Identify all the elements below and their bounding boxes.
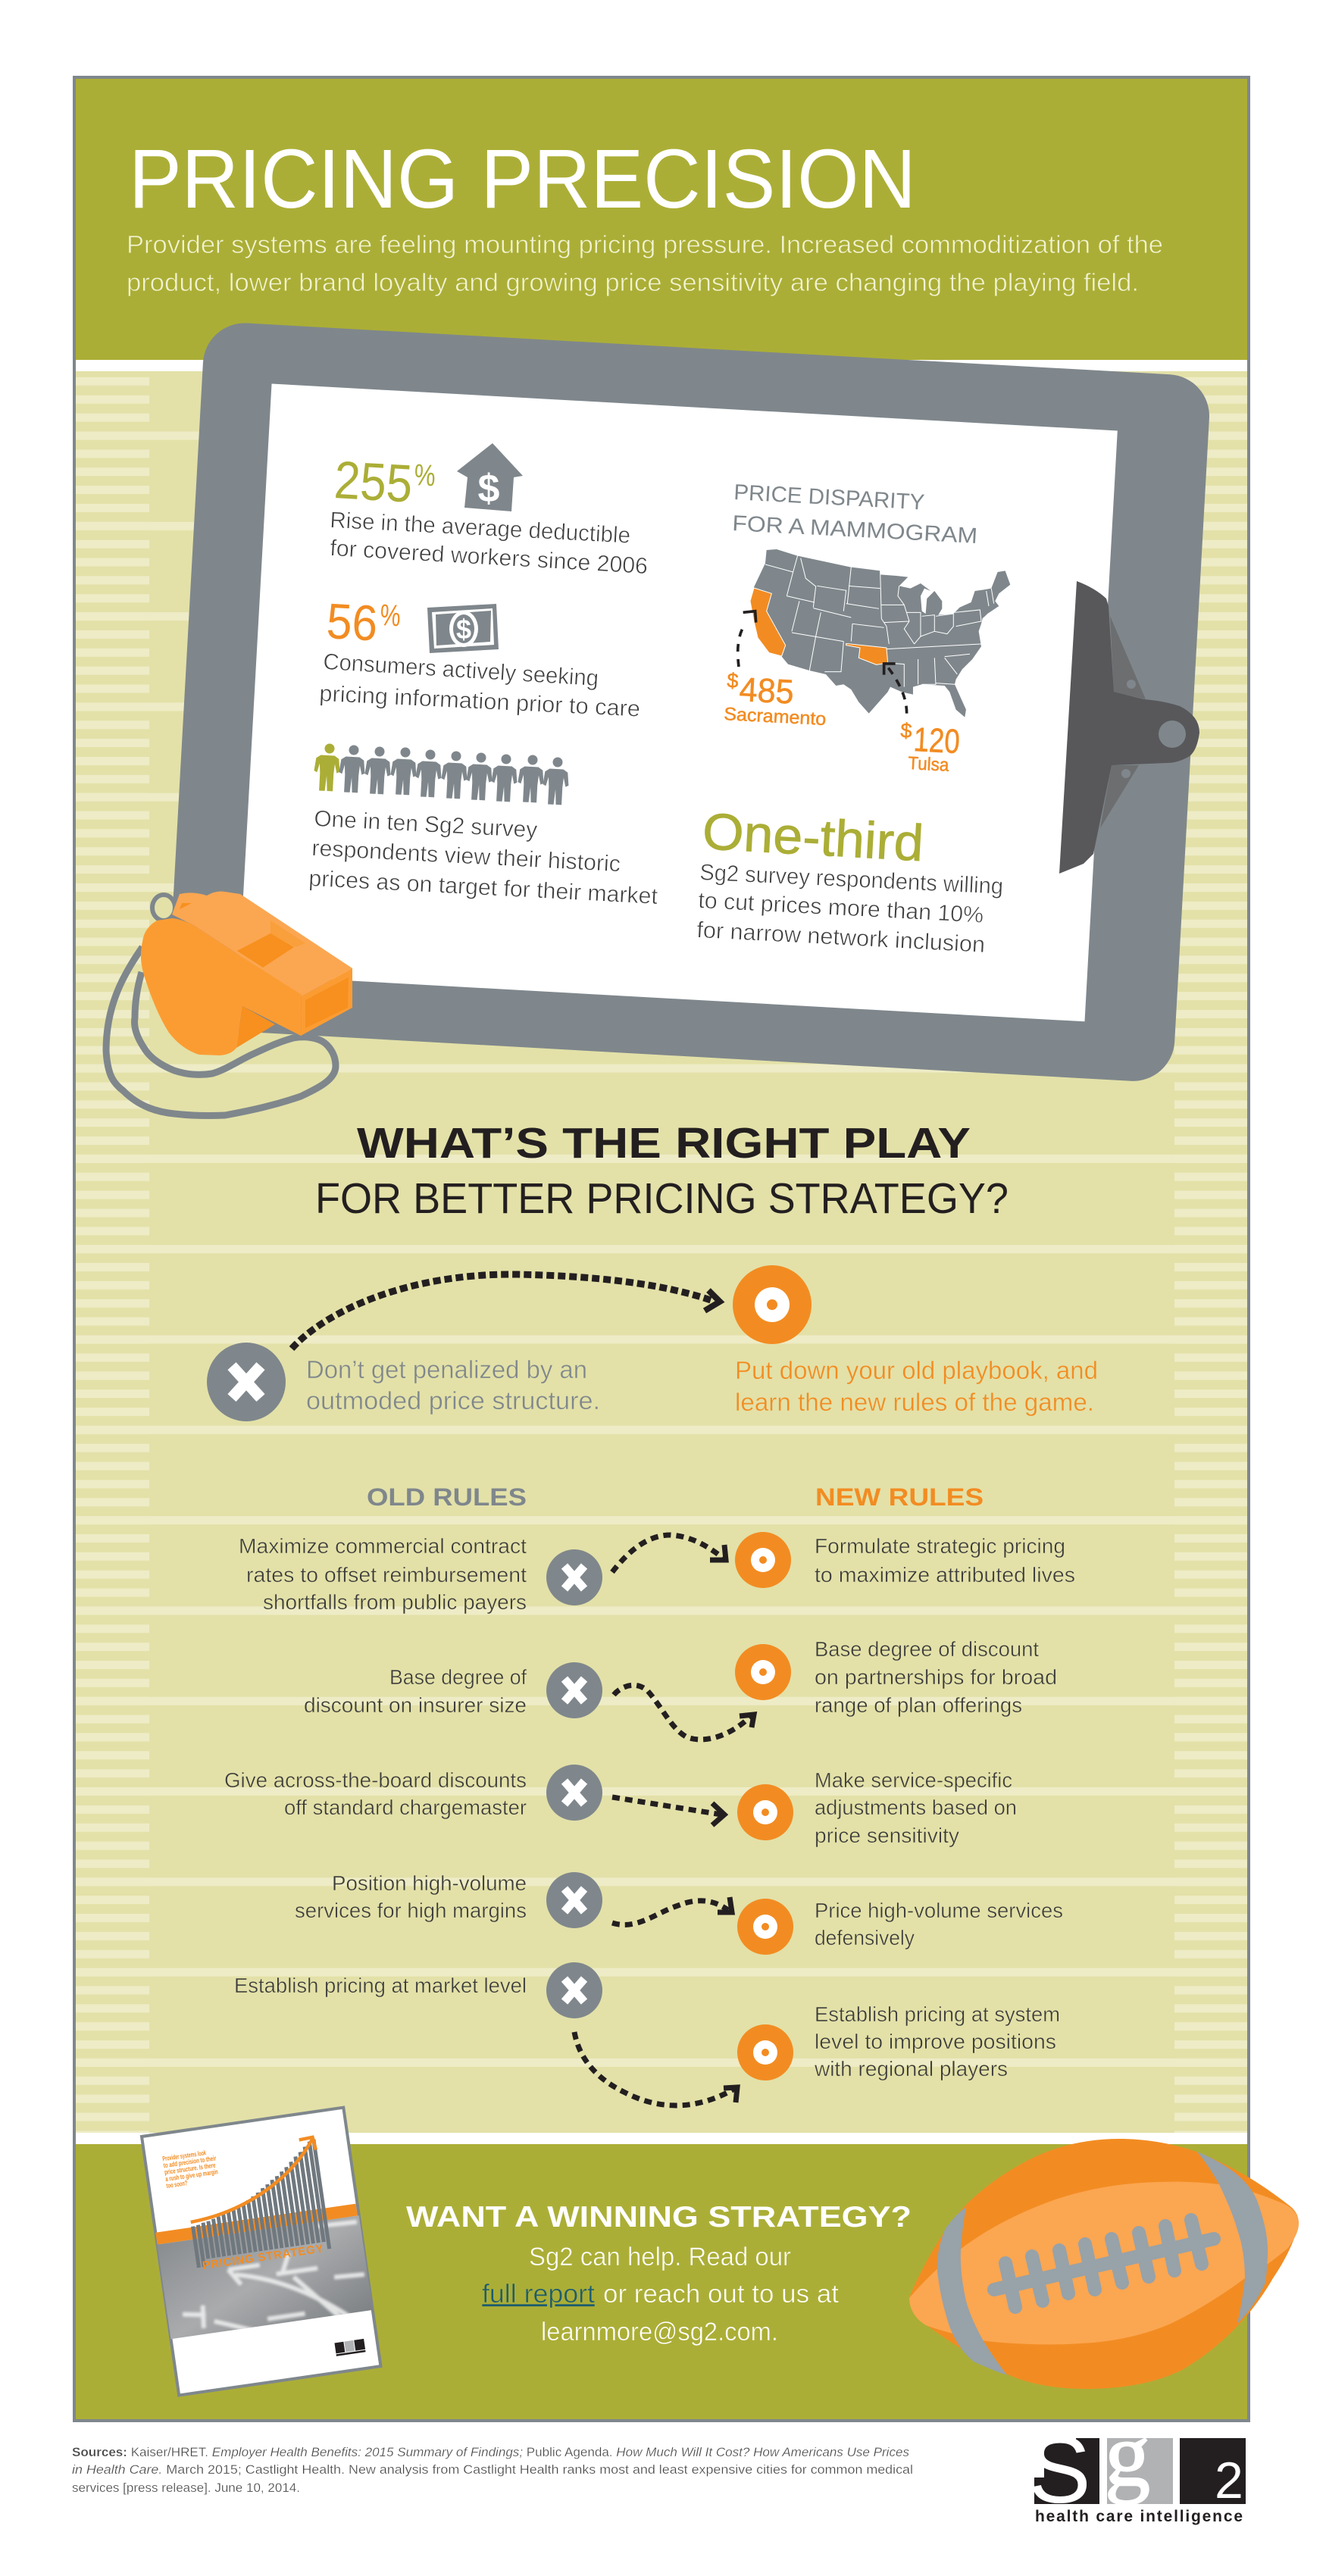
- list: old rules text: shortfalls from public payers: [263, 1590, 527, 1614]
- list: old rules text: rates to offset reimbursement: [246, 1563, 527, 1587]
- stat: 255% deductible: 255: [333, 450, 414, 514]
- logo: sg2: S: [1028, 2418, 1091, 2523]
- list: old rules text: services for high margins: [295, 1899, 527, 1922]
- cover teaser text: price structure. Is there: [164, 2162, 216, 2176]
- label: tulsa price: $: [900, 719, 912, 742]
- state: california: [750, 588, 786, 656]
- list: new rules text: Make service-specific: [815, 1768, 1012, 1792]
- call to action: or reach out to us at: [603, 2280, 840, 2309]
- arrow: rising price: [181, 2137, 324, 2222]
- list: new rules text: level to improve positions: [815, 2030, 1056, 2053]
- logo: sg2: g: [1105, 2404, 1150, 2505]
- cover logo: [334, 2339, 366, 2356]
- list: new rules text: range of plan offerings: [815, 1693, 1022, 1717]
- list: new rules text: on partnerships for broad: [815, 1665, 1057, 1689]
- heading: old rules: OLD RULES: [367, 1483, 527, 1511]
- list: new rules text: Base degree of discount: [815, 1637, 1039, 1661]
- stat: 56% consumers: Consumers actively seeking: [323, 649, 599, 691]
- stat: one in ten: [308, 744, 658, 909]
- icons: old rule x markers: [546, 1549, 602, 2018]
- intro text: [127, 230, 1163, 296]
- stat: one-third: Sg2 survey respondents willing: [699, 860, 1004, 899]
- stat: one-third: to cut prices more than 10%: [698, 888, 984, 928]
- panel: header band: [74, 76, 1249, 360]
- heading: right play: FOR BETTER PRICING STRATEGY?: [315, 1174, 1009, 1223]
- icon: whistle with cord: [106, 892, 352, 1116]
- stat: one in ten: prices as on target for their market: [308, 866, 658, 909]
- list: old rules text: Establish pricing at market level: [234, 1974, 527, 1997]
- intro text: Provider systems are feeling mounting pricing pressure. Increased commoditization of the: [127, 230, 1163, 258]
- label: sacramento price: [724, 669, 827, 730]
- stat: 56% consumers: %: [380, 599, 402, 633]
- icon: house with dollar: [457, 443, 523, 511]
- stat: one-third: One-third: [701, 802, 925, 872]
- stat: price disparity map: [724, 480, 1010, 776]
- label: sacramento price: 485: [738, 670, 795, 711]
- stat: 255% deductible: %: [414, 458, 436, 493]
- stat: 255% deductible: [330, 443, 649, 579]
- cover teaser text: a rush to give up margin: [165, 2168, 218, 2183]
- label: sacramento price: Sacramento: [724, 704, 827, 730]
- panel: footer band: [74, 2144, 1249, 2420]
- stat: one-third: [696, 802, 1004, 958]
- state: oklahoma: [846, 643, 888, 664]
- label: sacramento price: $: [727, 669, 739, 692]
- icon: gray x: [207, 1343, 286, 1421]
- stat: 56% consumers: 56: [325, 592, 379, 652]
- text: put down your playbook: [735, 1356, 1098, 1416]
- call to action: [406, 2201, 912, 2346]
- arrow: to california: [738, 611, 756, 667]
- text: outmoded price structure: Don’t get penalized by an: [306, 1355, 587, 1383]
- list: new rules text: Price high-volume services: [815, 1899, 1063, 1922]
- text: put down your playbook: learn the new rules of the game.: [735, 1388, 1094, 1416]
- text: outmoded price structure: outmoded price structure.: [306, 1386, 600, 1415]
- arrow: main play: [292, 1274, 720, 1349]
- label: tulsa price: Tulsa: [908, 753, 950, 776]
- sources: in Health Care. March 2015; Castlight Health. New analysis from Castlight Health ranks most and least expensive cities for common medical: [72, 2462, 913, 2477]
- intro text: product, lower brand loyalty and growing price sensitivity are changing the playing field.: [127, 268, 1139, 296]
- heading: new rules: NEW RULES: [815, 1483, 984, 1511]
- cover title: PRICING STRATEGY: [202, 2242, 324, 2272]
- cover teaser text: to add precision to their: [163, 2154, 217, 2169]
- panel: football field: [74, 360, 1249, 2144]
- text: put down your playbook: Put down your old playbook, and: [735, 1356, 1098, 1384]
- list: old rules text: Position high-volume: [332, 1871, 527, 1895]
- heading: price disparity: FOR A MAMMOGRAM: [732, 511, 978, 549]
- stat: one-third: for narrow network inclusion: [696, 918, 986, 958]
- logo: sg2: 2: [1215, 2452, 1243, 2509]
- sources: Sources: Kaiser/HRET. Employer Health Benefits: 2015 Summary of Findings; Public Agenda. How Much Will It Cost? How Americans Use Prices: [72, 2445, 909, 2459]
- heading: price disparity: [732, 480, 978, 549]
- list: old rules text: Base degree of: [389, 1665, 527, 1689]
- bar chart: rising barcode: [183, 2140, 330, 2268]
- call to action: WANT A WINNING STRATEGY?: [406, 2201, 912, 2234]
- list: old rules text: Maximize commercial contract: [239, 1534, 527, 1558]
- stat: one in ten: respondents view their historic: [311, 836, 621, 877]
- list: new rules text: with regional players: [814, 2057, 1008, 2080]
- list: old rules text: discount on insurer size: [304, 1693, 527, 1717]
- label: tulsa price: [900, 719, 961, 776]
- icon: dollar bill: [427, 604, 499, 653]
- sources: services [press release]. June 10, 2014.: [72, 2481, 300, 2495]
- icons: new rule targets: [735, 1532, 793, 2080]
- map: united states: [738, 549, 1010, 717]
- stat: 56% consumers: [319, 592, 641, 722]
- cover teaser text: [162, 2147, 220, 2190]
- arrows: rule connectors: [574, 1535, 754, 2106]
- arrow: to oklahoma: [884, 664, 907, 714]
- icon: dollar bill: $: [456, 614, 471, 645]
- text: outmoded price structure: [306, 1355, 600, 1415]
- report cover: [142, 2108, 380, 2395]
- icon: orange target: [733, 1265, 812, 1344]
- label: tulsa price: 120: [912, 720, 961, 761]
- list: new rules text: Establish pricing at system: [815, 2002, 1060, 2026]
- list: new rules text: defensively: [815, 1926, 915, 1949]
- sources: [72, 2445, 913, 2495]
- list: old rules text: off standard chargemaster: [284, 1796, 527, 1819]
- list: new rules text: to maximize attributed lives: [815, 1563, 1075, 1587]
- call to action: Sg2 can help. Read our: [529, 2243, 791, 2271]
- list: old rules text: Give across-the-board discounts: [224, 1768, 527, 1792]
- cover teaser text: Provider systems look: [162, 2149, 207, 2162]
- stat: one in ten: One in ten Sg2 survey: [314, 806, 538, 843]
- stat: 255% deductible: for covered workers since 2006: [330, 536, 649, 579]
- call to action: learnmore@sg2.com.: [541, 2318, 778, 2346]
- list: old rules text: [224, 1534, 527, 1997]
- panel: clipboard tablet: [166, 321, 1212, 1083]
- list: new rules text: Formulate strategic pricing: [815, 1534, 1065, 1558]
- title: PRICING PRECISION: [129, 133, 916, 226]
- list: new rules text: price sensitivity: [815, 1824, 959, 1847]
- icon: football: [909, 2139, 1299, 2389]
- heading: price disparity: PRICE DISPARITY: [733, 480, 925, 515]
- cover teaser text: too soon?: [166, 2179, 188, 2190]
- list: new rules text: adjustments based on: [815, 1796, 1017, 1819]
- call to action: full report: [482, 2280, 596, 2309]
- stat: 255% deductible: Rise in the average deductible: [330, 508, 631, 549]
- stat: 56% consumers: pricing information prior to care: [319, 681, 641, 722]
- heading: right play: WHAT’S THE RIGHT PLAY: [357, 1119, 971, 1168]
- icon: row of ten people: [313, 744, 570, 805]
- icon: house with dollar: $: [478, 467, 500, 511]
- logo: sg2: [1028, 2404, 1246, 2525]
- list: new rules text: [814, 1534, 1075, 2080]
- heading: right play: [315, 1119, 1009, 1223]
- icon: clipboard clip: [1059, 581, 1199, 874]
- logo: sg2: health care intelligence: [1035, 2508, 1243, 2525]
